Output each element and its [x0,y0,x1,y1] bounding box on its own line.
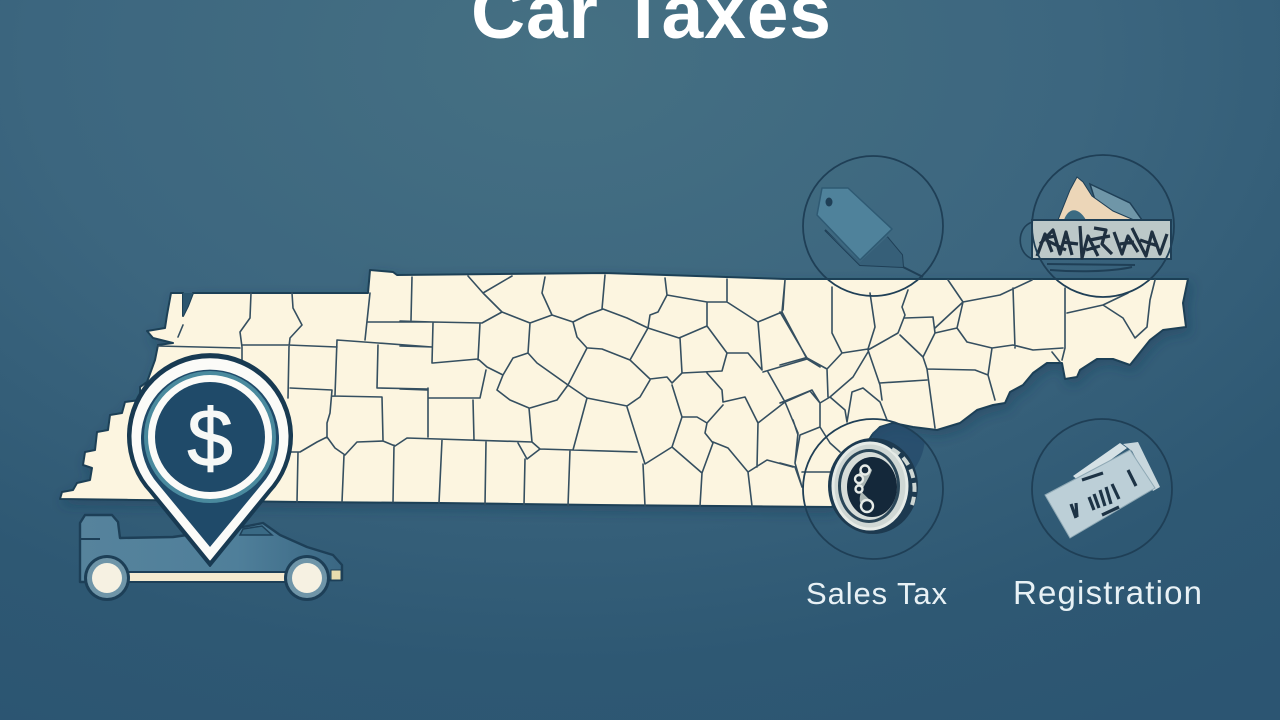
hub [847,457,897,517]
tag shadow fill [825,230,903,267]
cream crest [1058,177,1134,220]
pin outline [128,354,292,566]
sill stripe [120,572,290,582]
ring [803,156,943,296]
pin white band [132,359,288,560]
front card [1045,450,1155,538]
plate under-shadow [1047,264,1135,271]
headlight [331,570,341,580]
blue crest [1090,184,1142,220]
icon: price tag circle [803,156,943,296]
county lines [158,275,1155,506]
icon: wheel circle [803,419,943,559]
ring [803,419,943,559]
plate [1032,220,1171,259]
rear wheel [84,555,130,601]
tire rings [833,443,907,529]
plate scribble [1037,226,1167,258]
truck body [80,515,342,582]
state outline [60,270,1188,507]
tread [892,449,915,505]
teal ring [144,371,276,503]
ring [1032,155,1174,297]
lug bolts [855,466,873,512]
plate ear [1020,222,1033,259]
truck [80,515,342,601]
lug nuts [856,467,873,510]
icon: ticket circle [1032,419,1172,559]
white ring [148,375,272,499]
dark backing [872,424,924,468]
crest notch [1064,210,1086,220]
label: sales tax: Sales Tax [806,576,948,611]
truck window [240,526,272,535]
map: Tennessee counties [60,270,1188,507]
tag shadow outline [825,230,923,277]
ring [1032,419,1172,559]
dollar sign: $ [187,393,233,484]
card barcode [1071,470,1136,518]
tag hole [826,198,832,206]
icon: Reelfoot lake detail [183,293,193,316]
back card strip [1073,443,1127,482]
bed detail [80,538,100,540]
tire [828,438,918,534]
front wheel [284,555,330,601]
back card edge [1123,442,1160,491]
dollar disc [155,382,265,492]
label: registration: Registration [1013,574,1202,611]
pin dark core [141,370,279,547]
icon: license plate circle [1020,155,1174,297]
tag body [817,188,892,260]
icon: dollar location pin [128,354,292,566]
